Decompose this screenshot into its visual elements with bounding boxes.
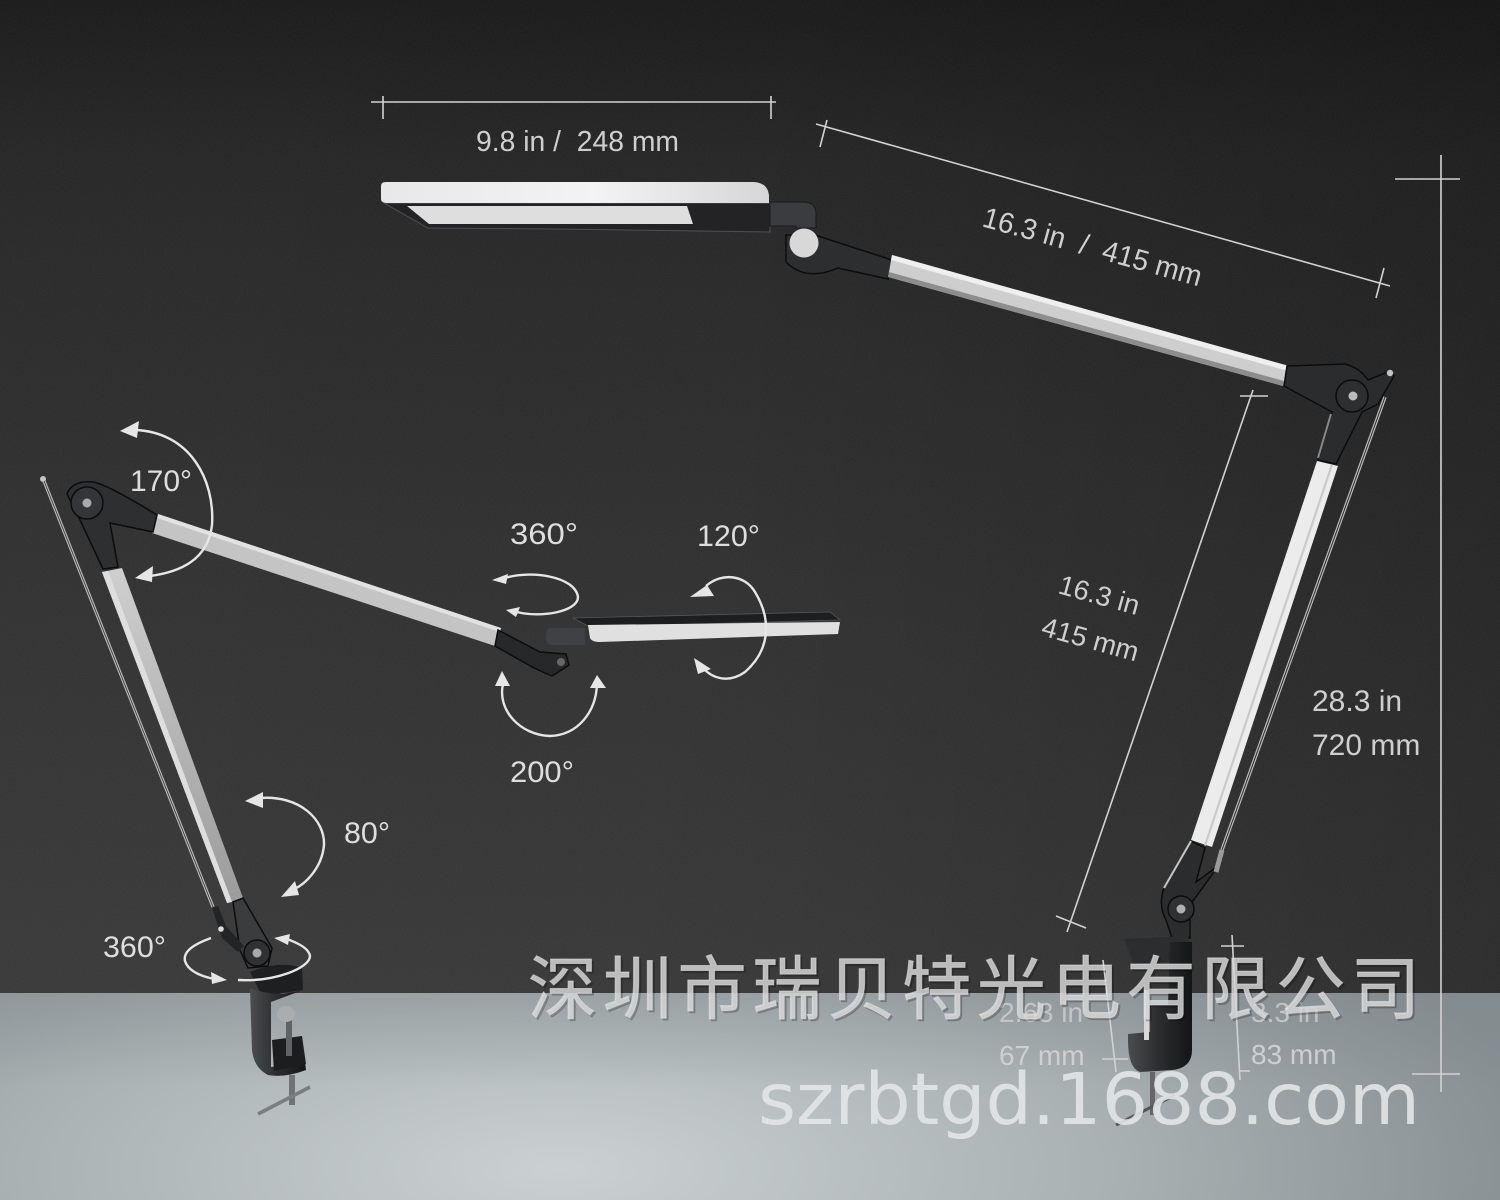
side view lower arm xyxy=(44,481,243,907)
side view elbow joint xyxy=(40,476,157,569)
rotation arrow: 170 degrees: 170° xyxy=(130,465,192,498)
dimension: upper arm length xyxy=(816,120,1390,298)
watermark: company name: 深圳市瑞贝特光电有限公司 xyxy=(530,953,1422,1030)
lamp head hinge xyxy=(770,202,892,279)
dimension: clamp depth: 83 mm xyxy=(1251,1039,1337,1070)
side view base joint xyxy=(212,898,272,968)
dimension: clamp opening: 67 mm xyxy=(999,1040,1085,1071)
rotation arrow: 120 degrees head xyxy=(690,520,766,679)
dimension: total height: 28.3 in xyxy=(1312,685,1402,718)
dimension: clamp opening: 2.63 in xyxy=(999,997,1083,1028)
dimension: total height xyxy=(1312,155,1460,1092)
dimension: lamp head width: 9.8 in / 248 mm xyxy=(476,126,679,158)
rotation arrow: 80 degrees base: 80° xyxy=(344,817,390,850)
side view lamp head and hinge xyxy=(495,612,840,676)
rotation arrow: 360 degrees base: 360° xyxy=(103,931,166,964)
side view upper arm xyxy=(152,514,501,646)
dimension: lower arm length: 16.3 in xyxy=(1055,569,1143,621)
base joint, front view xyxy=(1161,841,1222,938)
rotation arrow: 80 degrees base xyxy=(245,792,390,897)
rotation arrow: 200 degrees hinge xyxy=(495,671,606,789)
rotation arrow: 360 degrees base xyxy=(103,931,310,984)
dimension: lamp head width xyxy=(371,96,776,158)
elbow joint, front view xyxy=(1284,364,1394,464)
dimension: lower arm length xyxy=(1038,390,1268,932)
dimension: clamp opening xyxy=(999,960,1128,1072)
lamp, side view xyxy=(40,476,840,1114)
lamp head, front view xyxy=(381,182,892,279)
rotation arrow: 170 degrees xyxy=(120,421,212,582)
watermark: company name: 深圳市瑞贝特光电有限公司 xyxy=(528,951,1420,1028)
rotation arrow: 200 degrees hinge: 200° xyxy=(510,756,574,789)
dimension: upper arm length: 16.3 in / 415 mm xyxy=(979,202,1205,293)
grey table surface xyxy=(0,993,1500,1200)
rotation arrow: 360 degrees head xyxy=(492,518,578,617)
rotation arrow: 360 degrees head: 360° xyxy=(510,518,578,551)
dimension: lower arm length: 415 mm xyxy=(1038,611,1142,667)
desk clamp, front view xyxy=(1116,936,1192,1125)
rotation arrow: 120 degrees head: 120° xyxy=(697,520,760,553)
lamp lower arm, front view xyxy=(1191,397,1385,850)
lamp upper arm, front view xyxy=(888,255,1289,386)
watermark: website: szrbtgd.1688.com xyxy=(758,1058,1420,1141)
side view desk clamp xyxy=(250,965,310,1114)
dimension: clamp depth xyxy=(1221,935,1337,1080)
dimension: clamp depth: 3.3 in xyxy=(1251,997,1320,1028)
dimension: total height: 720 mm xyxy=(1312,729,1420,762)
